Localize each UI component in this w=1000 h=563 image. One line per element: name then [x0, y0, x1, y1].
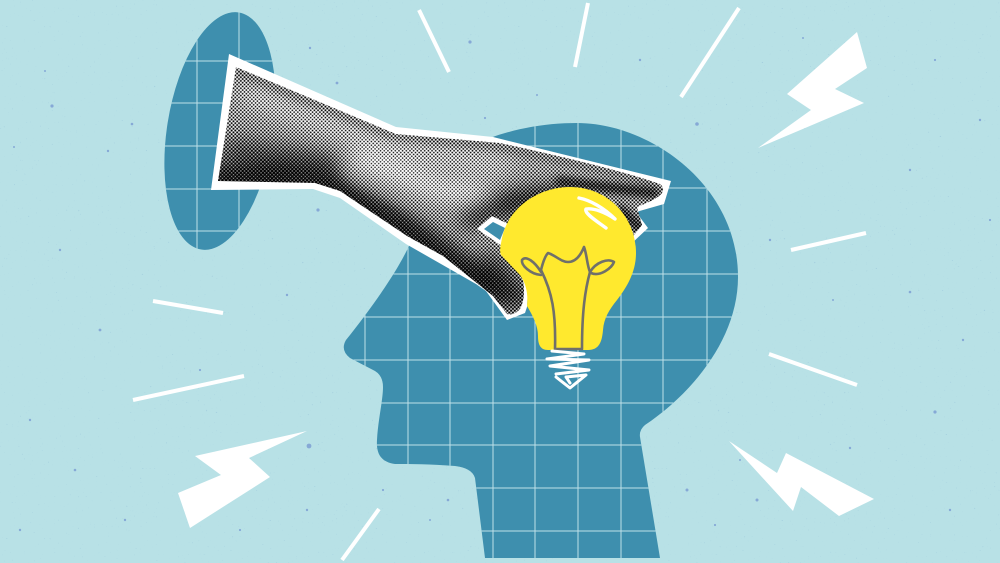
hand white cut-out border — [211, 54, 671, 320]
light bulb — [500, 187, 636, 388]
halftone hand — [200, 50, 680, 330]
lightning bolt bottom right — [729, 441, 874, 516]
lightning bolt top right — [758, 32, 867, 148]
bulb glass — [500, 187, 636, 350]
ray lines — [133, 3, 866, 560]
bulb filament — [522, 247, 614, 349]
bulb screw base — [547, 351, 589, 388]
lightning bolt bottom left — [178, 431, 307, 528]
panel: ellipse opening with grid — [164, 12, 274, 250]
hand halftone texture — [218, 67, 663, 314]
head silhouette with grid — [340, 120, 740, 563]
bulb highlight squiggle — [579, 198, 615, 228]
gap between thumb and finger — [477, 216, 508, 246]
